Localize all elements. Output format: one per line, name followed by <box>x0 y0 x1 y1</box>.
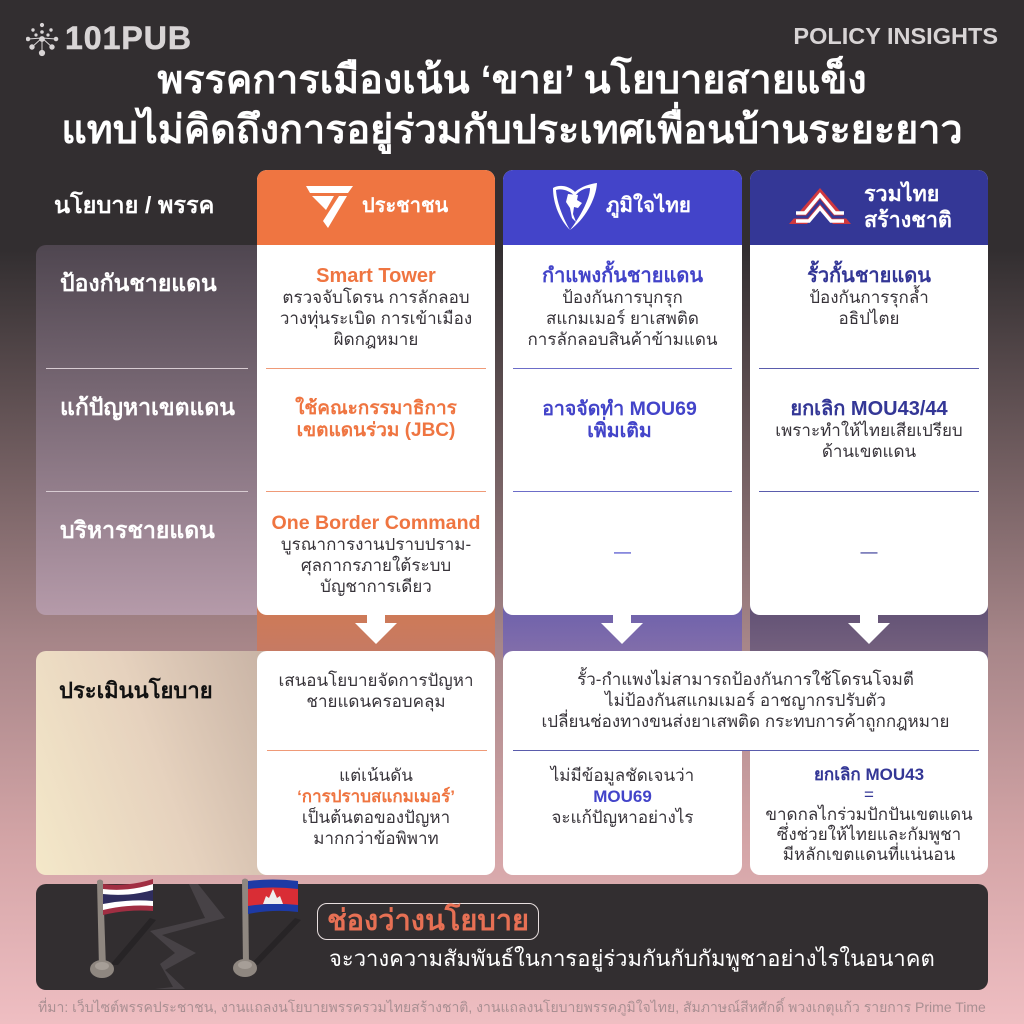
header: People's Party <box>257 170 495 245</box>
panel: United Thai Nation column <box>750 170 988 615</box>
assessment text: เสนอนโยบายจัดการปัญหา <box>278 671 474 690</box>
assessment text: ไม่ป้องกันสแกมเมอร์ อาชญากรปรับตัว <box>605 691 886 710</box>
logo: 101PUB <box>26 20 192 56</box>
assessment text: รั้ว-กำแพงไม่สามารถป้องกันการใช้โดรนโจมตี <box>577 670 914 689</box>
arrow <box>601 615 643 644</box>
cell text <box>775 398 963 461</box>
assessment text <box>542 667 949 732</box>
cell text: อาจจัดทำ MOU69 <box>542 398 697 420</box>
connector band: orange <box>257 600 495 660</box>
header: United Thai Nation <box>750 170 988 245</box>
assessment text: แต่เน้นดัน <box>339 766 413 785</box>
assessment text: เปลี่ยนช่องทางขนส่งยาเสพติด กระทบการค้าถูกกฎหมาย <box>542 712 949 731</box>
panel: evaluation United Thai Nation <box>750 751 988 875</box>
heading: policy evaluation: ประเมินนโยบาย <box>59 678 213 703</box>
icon: chevron logo <box>789 188 851 224</box>
cell text: รั้วกั้นชายแดน <box>807 265 931 287</box>
party name <box>864 181 952 232</box>
text: gap question: จะวางความสัมพันธ์ในการอยู่ร่วมกันกับกัมพูชาอย่างไรในอนาคต <box>329 946 935 971</box>
row label: solve border problems: แก้ปัญหาเขตแดน <box>60 394 235 420</box>
cell text: วางทุ่นระเบิด การเข้าเมือง <box>280 309 472 328</box>
panel: evaluation shared <box>503 651 988 751</box>
assessment text <box>765 765 973 864</box>
assessment text: มีหลักเขตแดนที่แน่นอน <box>783 845 955 864</box>
panel: evaluation Bhumjaithai <box>503 751 742 875</box>
cell text: Smart Tower <box>316 265 436 287</box>
icon: party logo <box>306 186 353 228</box>
arrow <box>848 615 890 644</box>
connector band: blue <box>503 600 742 660</box>
cell text <box>280 265 472 349</box>
title: แทบไม่คิดถึงการอยู่ร่วมกับประเทศเพื่อนบ้านระยะยาว <box>61 108 963 152</box>
cell text: One Border Command <box>271 512 481 534</box>
assessment text: ซึ่งช่วยให้ไทยและกัมพูชา <box>777 825 961 844</box>
cell text <box>295 396 457 441</box>
cell text <box>527 260 718 349</box>
Cambodia flag <box>233 878 301 977</box>
assessment text: ‘การปราบสแกมเมอร์’ <box>297 787 455 806</box>
connector band: navy <box>750 600 988 660</box>
column heading: policy / party: นโยบาย / พรรค <box>54 192 214 218</box>
cell text: ตรวจจับโดรน การลักลอบ <box>282 288 470 307</box>
assessment text: เป็นต้นตอของปัญหา <box>302 808 450 827</box>
arrow <box>355 615 397 644</box>
assessment text: MOU69 <box>593 787 652 806</box>
cell text: ใช้คณะกรรมาธิการ <box>295 398 457 419</box>
panel: evaluation People's Party <box>257 651 495 875</box>
row label: border management: บริหารชายแดน <box>60 517 215 543</box>
cell text: เพราะทำให้ไทยเสียเปรียบ <box>775 421 963 440</box>
source note: ที่มา: เว็บไซต์พรรคประชาชน, งานแถลงนโยบายพรรครวมไทยสร้างชาติ, งานแถลงนโยบายพรรคภูมิใจไทย, สัมภาษณ์สีหศักดิ์ พวงเกตุแก้ว รายการ Prime Time <box>38 999 986 1015</box>
panel: People's Party column <box>257 170 495 615</box>
cell text: none: — <box>614 542 631 561</box>
party name: รวมไทย <box>864 182 939 206</box>
cell text <box>542 398 697 442</box>
cell text: ผิดกฎหมาย <box>334 330 418 349</box>
party name: สร้างชาติ <box>864 208 952 232</box>
cell text: บัญชาการเดียว <box>320 577 432 596</box>
party name: ประชาชน <box>362 195 448 217</box>
cell text: ศุลกากรภายใต้ระบบ <box>301 556 451 575</box>
assessment text: ไม่มีข้อมูลชัดเจนว่า <box>551 766 694 785</box>
icon: logo burst <box>26 22 58 56</box>
assessment text <box>550 766 694 827</box>
assessment text: ชายแดนครอบคลุม <box>306 692 446 711</box>
cell text <box>271 512 481 596</box>
row label: border defence: ป้องกันชายแดน <box>60 270 217 296</box>
assessment text <box>297 766 455 848</box>
badge: policy gap: ช่องว่างนโยบาย <box>327 905 529 937</box>
panel: policy gap <box>36 884 988 990</box>
icon: heart logo <box>553 183 597 230</box>
cell text: ด้านเขตแดน <box>822 442 916 461</box>
wordmark: 101PUB <box>65 20 192 56</box>
cell text: none: — <box>860 542 878 561</box>
title <box>61 56 963 154</box>
cell text: การลักลอบสินค้าข้ามแดน <box>527 330 718 349</box>
cell text: เพิ่มเติม <box>587 420 652 442</box>
header: Bhumjaithai <box>503 170 742 245</box>
assessment text <box>278 670 474 712</box>
assessment text: ขาดกลไกร่วมปักปันเขตแดน <box>765 805 973 824</box>
cell text: กำแพงกั้นชายแดน <box>542 265 703 287</box>
panel: evaluation label <box>36 651 276 875</box>
cell text: ป้องกันการรุกล้ำ <box>809 288 929 307</box>
title: พรรคการเมืองเน้น ‘ขาย’ นโยบายสายแข็ง <box>157 58 867 102</box>
assessment text: ยกเลิก MOU43 <box>814 765 924 784</box>
assessment text: = <box>864 785 874 804</box>
cell text: บูรณาการงานปราบปราม- <box>281 535 471 554</box>
party name: ภูมิใจไทย <box>606 194 691 217</box>
label: POLICY INSIGHTS: POLICY INSIGHTS <box>793 23 998 49</box>
illustration: crack and flags <box>90 878 300 989</box>
Thai flag <box>90 879 156 978</box>
border crack <box>150 884 225 989</box>
cell text: ป้องกันการบุกรุก <box>562 288 683 307</box>
panel: row labels <box>36 245 276 615</box>
assessment text: จะแก้ปัญหาอย่างไร <box>551 808 694 827</box>
cell text: เขตแดนร่วม (JBC) <box>297 420 455 441</box>
cell text: ยกเลิก MOU43/44 <box>790 398 948 420</box>
cell text: อธิปไตย <box>839 309 899 328</box>
assessment text: มากกว่าข้อพิพาท <box>313 829 439 848</box>
panel: Bhumjaithai column <box>503 170 742 615</box>
cell text: สแกมเมอร์ ยาเสพติด <box>546 309 699 328</box>
cell text <box>807 260 931 328</box>
